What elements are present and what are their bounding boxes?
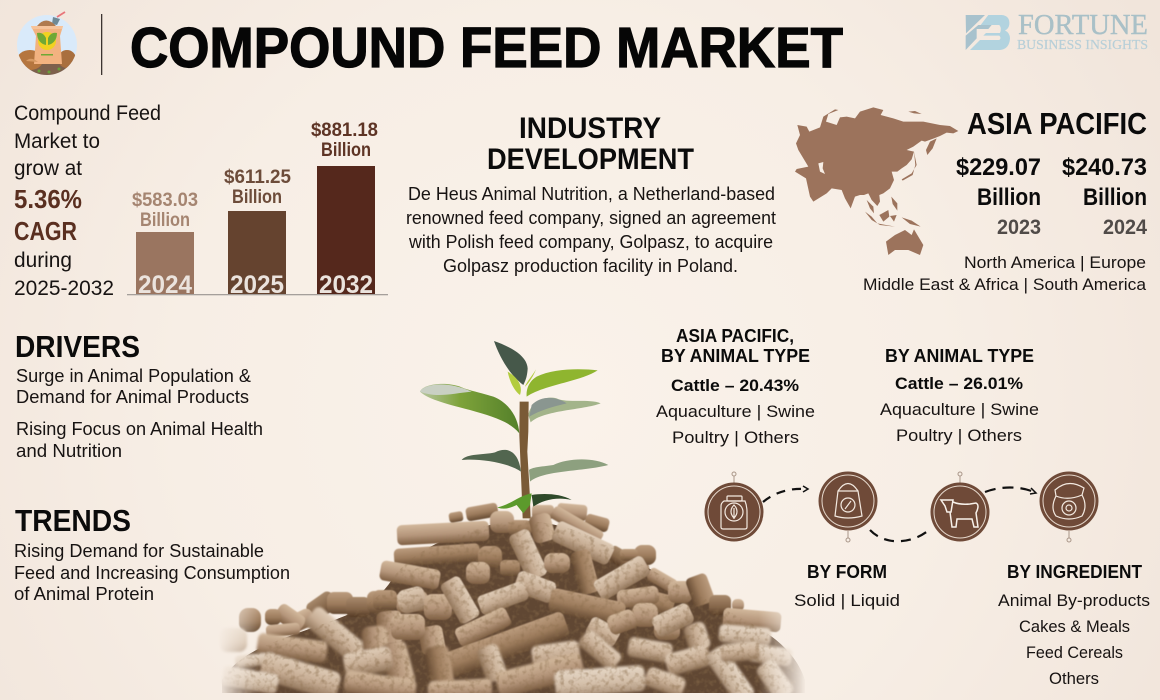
panel: global by animal type: Aquaculture | Swine <box>880 400 1039 419</box>
panel: drivers: Surge in Animal Population & <box>16 366 251 386</box>
bar: 2024: 2024 <box>138 271 192 299</box>
panel: trends: of Animal Protein <box>14 584 154 604</box>
text: industry development body: De Heus Animal Nutrition, a Netherland-based <box>408 184 775 204</box>
panel: by ingredient: Feed Cereals <box>1026 643 1123 662</box>
arrow: jar to sack <box>763 486 808 502</box>
stat: Asia Pacific 2024 <box>1062 154 1147 239</box>
text: industry development body: Golpasz production facility in Poland. <box>443 256 738 276</box>
text: other regions <box>863 253 1147 294</box>
heading: industry development: DEVELOPMENT <box>487 143 694 176</box>
stat: Asia Pacific 2023 <box>956 154 1041 239</box>
bar: 2025: 2025 <box>230 271 284 299</box>
bar: 2024: $583.03 <box>132 190 198 211</box>
bar: 2032: $881.18 <box>311 120 378 141</box>
panel: Asia Pacific by animal type: Aquaculture | Swine <box>656 402 815 421</box>
stat: Asia Pacific 2024: 2024 <box>1103 216 1147 239</box>
bar: 2025 <box>224 167 291 299</box>
panel: by ingredient <box>998 562 1150 688</box>
text: CAGR summary: grow at <box>14 157 82 180</box>
panel: by ingredient: Cakes & Meals <box>1019 617 1130 636</box>
logo: Fortune Business Insights: FORTUNE <box>1018 9 1148 41</box>
text: other regions: Middle East & Africa | South America <box>863 275 1147 294</box>
text: CAGR summary: CAGR <box>14 216 77 246</box>
panel: Asia Pacific by animal type: Poultry | Others <box>672 428 799 447</box>
icon: cow <box>930 472 990 542</box>
panel: drivers: DRIVERS <box>15 329 140 364</box>
heading: industry development <box>487 112 694 176</box>
text: industry development body <box>406 184 776 276</box>
panel: Asia Pacific by animal type: BY ANIMAL TYPE <box>661 346 810 366</box>
text: industry development body: with Polish feed company, Golpasz, to acquire <box>408 232 773 252</box>
text: CAGR summary: 2025-2032 <box>14 277 114 300</box>
panel: Asia Pacific by animal type <box>656 326 815 447</box>
arrow: sack to cow <box>870 530 929 541</box>
panel: by ingredient: Animal By-products <box>998 591 1150 610</box>
panel: global by animal type: BY ANIMAL TYPE <box>885 346 1034 366</box>
text: other regions: North America | Europe <box>964 253 1146 272</box>
panel: global by animal type: Poultry | Others <box>896 426 1022 445</box>
stat: Asia Pacific 2023: 2023 <box>997 216 1041 239</box>
panel: by ingredient: Others <box>1049 669 1099 688</box>
map: Asia Pacific <box>795 107 958 255</box>
text: CAGR summary: Market to <box>14 130 100 153</box>
panel: trends: Feed and Increasing Consumption <box>14 563 290 583</box>
title: COMPOUND FEED MARKET <box>130 16 843 80</box>
arrow: cow to ingredient sack <box>985 488 1036 494</box>
text: industry development body: renowned feed company, signed an agreement <box>406 208 776 228</box>
panel: Asia Pacific by animal type: Cattle – 20.43% <box>671 376 799 395</box>
stat: Asia Pacific 2023: Billion <box>977 184 1041 211</box>
icon: feed sack with grain <box>818 472 878 542</box>
panel: by ingredient: BY INGREDIENT <box>1007 562 1142 582</box>
panel: by form <box>794 562 900 610</box>
icon: jar with leaf <box>704 472 764 542</box>
bar: 2032 <box>311 120 378 299</box>
stat: Asia Pacific 2024: $240.73 <box>1062 154 1147 181</box>
panel: global by animal type <box>880 346 1039 445</box>
text: CAGR summary: 5.36% <box>14 184 82 214</box>
text: CAGR summary <box>14 102 161 300</box>
bar chart: market size <box>127 120 388 299</box>
text: CAGR summary: during <box>14 249 72 272</box>
logo: Fortune Business Insights <box>966 9 1148 53</box>
bar: 2024: Billion <box>140 210 190 231</box>
panel: drivers: Demand for Animal Products <box>16 387 249 407</box>
panel: drivers <box>15 329 263 461</box>
bar: 2032: 2032 <box>319 271 373 299</box>
illustration: feed pellet pile <box>219 502 805 700</box>
panel: Asia Pacific by animal type: ASIA PACIFIC, <box>676 326 794 346</box>
bar: 2025: Billion <box>232 187 282 208</box>
text: CAGR summary: Compound Feed <box>14 102 161 125</box>
panel: drivers: Rising Focus on Animal Health <box>16 419 263 439</box>
panel: by form: Solid | Liquid <box>794 591 900 610</box>
panel: trends <box>14 503 290 604</box>
stat: Asia Pacific 2024: Billion <box>1083 184 1147 211</box>
bar: 2024 <box>132 190 198 299</box>
logo: Fortune Business Insights: BUSINESS INSIGHTS <box>1017 38 1148 53</box>
bar: 2032: Billion <box>321 140 371 161</box>
panel: global by animal type: Cattle – 26.01% <box>895 374 1023 393</box>
heading: industry development: INDUSTRY <box>519 112 661 145</box>
panel: drivers: and Nutrition <box>16 441 122 461</box>
panel: trends: Rising Demand for Sustainable <box>14 541 264 561</box>
panel: by form: BY FORM <box>807 562 887 582</box>
icon: ingredient sack <box>1040 472 1098 542</box>
panel: trends: TRENDS <box>15 503 131 538</box>
stat: Asia Pacific 2023: $229.07 <box>956 154 1041 181</box>
illustration: seedling <box>420 341 608 518</box>
icon: feed bag logo <box>17 12 77 76</box>
bar: 2025: $611.25 <box>224 167 291 188</box>
